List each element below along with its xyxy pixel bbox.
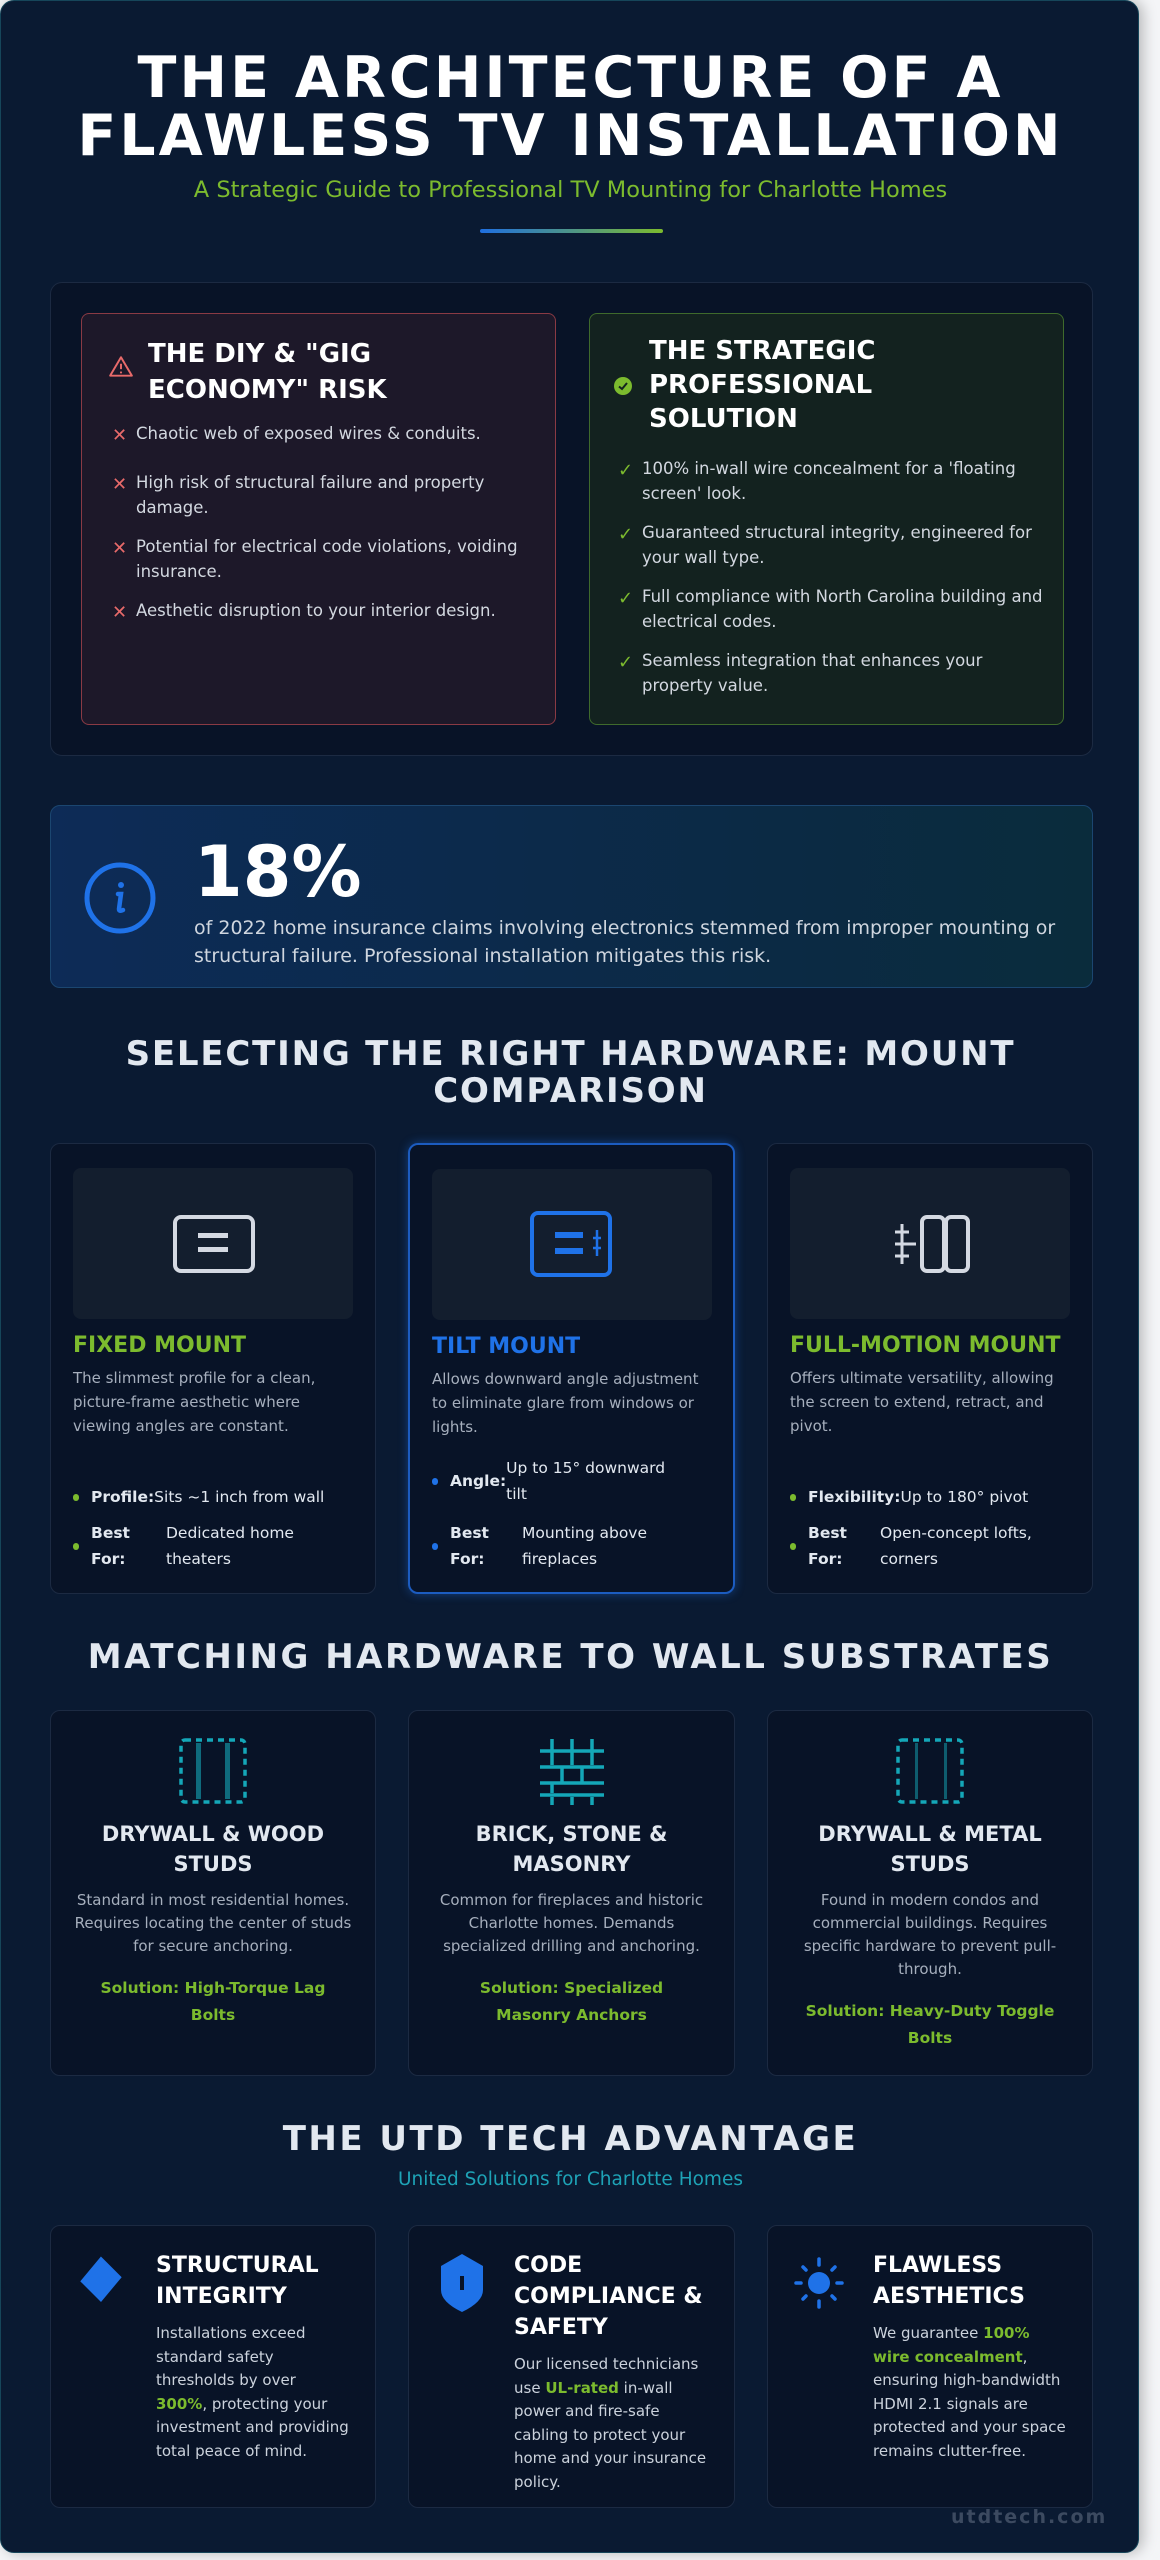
bullets: tilt: tilt (506, 1485, 527, 1503)
card: drywall wood (50, 1710, 376, 2076)
card: metal studs: Found in modern condos and commercial buildings. Requires specific hardware to prevent pull-through. (804, 1891, 1056, 1978)
icon: warning (109, 356, 133, 377)
card: masonry: MASONRY (513, 1852, 630, 1876)
list: benefits: Seamless integration that enhances your property value. (642, 651, 982, 695)
list: risks: High risk of structural failure and property damage. (136, 473, 484, 517)
heading: DIY (148, 339, 388, 405)
text: full-motion (790, 1333, 1060, 1435)
bullets: fixed (73, 1488, 324, 1506)
text: structural: INTEGRITY (156, 2284, 287, 2309)
card: full-motion mount: For: (808, 1550, 842, 1568)
text: tilt: TILT MOUNT (432, 1334, 580, 1359)
heading: professional: SOLUTION (649, 404, 798, 434)
card: tilt mount: fireplaces (522, 1550, 597, 1568)
card: full-motion mount: Best (808, 1524, 847, 1542)
text: full-motion: Offers ultimate versatility, allowing the screen to extend, retract, and pivot. (790, 1369, 1054, 1435)
stat text: of 2022 home insurance claims involving electronics stemmed from improper mounting or structural failure. Professional installation mitigates this risk. (194, 917, 1055, 967)
text: code: home and your insurance (514, 2449, 706, 2467)
card: tilt mount: Mounting above (522, 1524, 647, 1542)
panel: DIY risk: ✕ (112, 474, 127, 495)
list: benefits: Guaranteed structural integrity, engineered for your wall type. (642, 523, 1032, 567)
card: tilt mount: For: (450, 1550, 484, 1568)
card: fixed mount: theaters (166, 1550, 231, 1568)
bullets: fixed: Sits ~1 inch from wall (154, 1488, 324, 1506)
card: structural integrity (50, 2225, 376, 2508)
icon: info (84, 862, 156, 934)
text: aesthetics: HDMI 2.1 signals are (873, 2394, 1028, 2412)
heading: professional: PROFESSIONAL (649, 370, 872, 400)
card: drywall wood: DRYWALL & WOOD (102, 1822, 324, 1846)
card: full-motion mount (767, 1143, 1093, 1594)
heading: advantage: THE UTD TECH ADVANTAGE (283, 2119, 858, 2159)
heading: mount comparison: COMPARISON (433, 1071, 708, 1111)
card: tilt mount: Best (450, 1524, 489, 1542)
list: risks: Aesthetic disruption to your interior design. (136, 601, 496, 620)
card: tilt mount (408, 1143, 735, 1594)
list: benefits (618, 459, 1043, 695)
heading: DIY: THE DIY & "GIG (148, 339, 371, 369)
panel: DIY risk (81, 313, 556, 725)
text: aesthetics: We guarantee 100% (873, 2324, 1030, 2342)
list: benefits: Full compliance with North Carolina building and electrical codes. (642, 587, 1043, 631)
text: code: policy. (514, 2472, 561, 2490)
stat number: 18% (194, 831, 362, 913)
card: drywall wood: STUDS (173, 1852, 253, 1876)
bullets: tilt: Angle: (450, 1472, 506, 1490)
text: fixed: FIXED MOUNT (73, 1333, 246, 1358)
panel: DIY risk: ✕ (112, 538, 127, 559)
card: drywall wood: Bolts (191, 2006, 235, 2024)
panel: DIY risk: ✕ (112, 425, 127, 446)
bullets: fixed: Profile: (91, 1488, 154, 1506)
icon: tilt (432, 1169, 712, 1320)
text: fixed: The slimmest profile for a clean, picture-frame aesthetic where viewing angles are constant. (73, 1369, 315, 1435)
text: aesthetics: remains clutter-free. (873, 2442, 1026, 2460)
card: masonry: Common for fireplaces and historic Charlotte homes. Demands specialized drilling and anchoring. (440, 1891, 703, 1955)
panel: professional solution: ✓ (618, 652, 633, 673)
text: code (514, 2253, 706, 2490)
text: structural: STRUCTURAL (156, 2253, 319, 2278)
panel: professional solution: ✓ (618, 588, 633, 609)
list: risks: Chaotic web of exposed wires & conduits. (136, 424, 481, 443)
list: benefits: 100% in-wall wire concealment for a 'floating screen' look. (642, 459, 1016, 503)
icon: full-motion (790, 1168, 1070, 1319)
text: structural: thresholds by over (156, 2371, 296, 2389)
card: masonry (408, 1710, 735, 2076)
icon: wood studs (179, 1738, 247, 1804)
panel: professional solution (589, 313, 1064, 725)
icon: brick (540, 1739, 604, 1805)
icon: check circle (614, 377, 632, 395)
text: aesthetics: protected and your space (873, 2418, 1066, 2436)
heading: professional: THE STRATEGIC (649, 336, 875, 366)
list: risks: Potential for electrical code violations, voiding insurance. (136, 537, 518, 581)
text: full-motion: FULL-MOTION MOUNT (790, 1333, 1060, 1358)
card: metal studs: Solution: Heavy-Duty Toggle (806, 2002, 1054, 2020)
list: risks (112, 424, 518, 623)
title: FLAWLESS TV INSTALLATION (77, 103, 1064, 169)
card: metal studs (767, 1710, 1093, 2076)
card: full-motion mount: corners (880, 1550, 938, 1568)
gradient divider (480, 229, 663, 233)
card: code compliance (408, 2225, 735, 2508)
stat banner (50, 805, 1093, 988)
card: fixed mount: Dedicated home (166, 1524, 294, 1542)
heading: professional (649, 336, 875, 434)
panel: professional solution: ✓ (618, 460, 633, 481)
card: fixed mount: Best (91, 1524, 130, 1542)
subtitle: advantage: United Solutions for Charlotte Homes (398, 2169, 743, 2190)
icon: metal studs (896, 1738, 964, 1804)
icon: diamond (80, 2256, 122, 2302)
card: masonry: Masonry Anchors (496, 2006, 647, 2024)
heading: wall substrates: MATCHING HARDWARE TO WALL SUBSTRATES (88, 1637, 1053, 1677)
text: structural (156, 2253, 349, 2460)
text: aesthetics: wire concealment, (873, 2348, 1027, 2366)
text: code: COMPLIANCE & (514, 2284, 703, 2309)
card: fixed mount: For: (91, 1550, 125, 1568)
icon: shield (441, 2254, 483, 2312)
card: drywall wood: Standard in most residential homes. Requires locating the center of studs for secure anchoring. (75, 1891, 351, 1955)
text: aesthetics: AESTHETICS (873, 2284, 1025, 2309)
heading: mount comparison: SELECTING THE RIGHT HARDWARE: MOUNT (126, 1034, 1015, 1074)
card: metal studs: Bolts (908, 2029, 952, 2047)
subtitle: A Strategic Guide to Professional TV Mounting for Charlotte Homes (194, 177, 947, 203)
bullets: full-motion: Up to 180° pivot (900, 1488, 1028, 1506)
card: fixed mount (50, 1143, 376, 1594)
footer: website: utdtech.com (951, 2506, 1107, 2528)
text: code: CODE (514, 2253, 582, 2278)
bullets: tilt (432, 1459, 665, 1503)
title: THE ARCHITECTURE OF A (138, 45, 1003, 111)
panel: DIY risk: ✕ (112, 602, 127, 623)
card: metal studs: STUDS (890, 1852, 970, 1876)
text: aesthetics: FLAWLESS (873, 2253, 1002, 2278)
text: aesthetics (873, 2253, 1066, 2460)
icon: fixed (73, 1168, 353, 1319)
text: aesthetics: ensuring high-bandwidth (873, 2371, 1060, 2389)
text: tilt (432, 1334, 698, 1436)
text: code: Our licensed technicians (514, 2355, 698, 2373)
panel: comparison (50, 282, 1093, 756)
card: drywall wood: Solution: High-Torque Lag (100, 1979, 326, 1997)
text: tilt: Allows downward angle adjustment to eliminate glare from windows or lights. (432, 1370, 698, 1436)
bullets: tilt: Up to 15° downward (506, 1459, 665, 1477)
card: masonry: BRICK, STONE & (476, 1822, 667, 1846)
text: code: SAFETY (514, 2315, 608, 2340)
title (77, 45, 1064, 169)
text: structural: 300%, protecting your investment and providing total peace of mind. (156, 2394, 349, 2460)
bullets: full-motion (790, 1488, 1028, 1506)
card: masonry: Solution: Specialized (480, 1979, 663, 1997)
icon: sun (794, 2257, 844, 2309)
text: code: power and fire-safe (514, 2402, 660, 2420)
card: full-motion mount: Open-concept lofts, (880, 1524, 1032, 1542)
panel: professional solution: ✓ (618, 524, 633, 545)
text: code: cabling to protect your (514, 2426, 685, 2444)
card: flawless aesthetics (767, 2225, 1093, 2508)
text: structural: standard safety (156, 2348, 274, 2366)
card: metal studs: DRYWALL & METAL (818, 1822, 1042, 1846)
heading: mount comparison (126, 1034, 1015, 1111)
text: code: use UL-rated in-wall (514, 2378, 673, 2396)
text: fixed (72, 1333, 315, 1435)
bullets: full-motion: Flexibility: (808, 1488, 900, 1506)
text: structural: Installations exceed (156, 2324, 305, 2342)
heading: DIY: ECONOMY" RISK (148, 375, 387, 405)
